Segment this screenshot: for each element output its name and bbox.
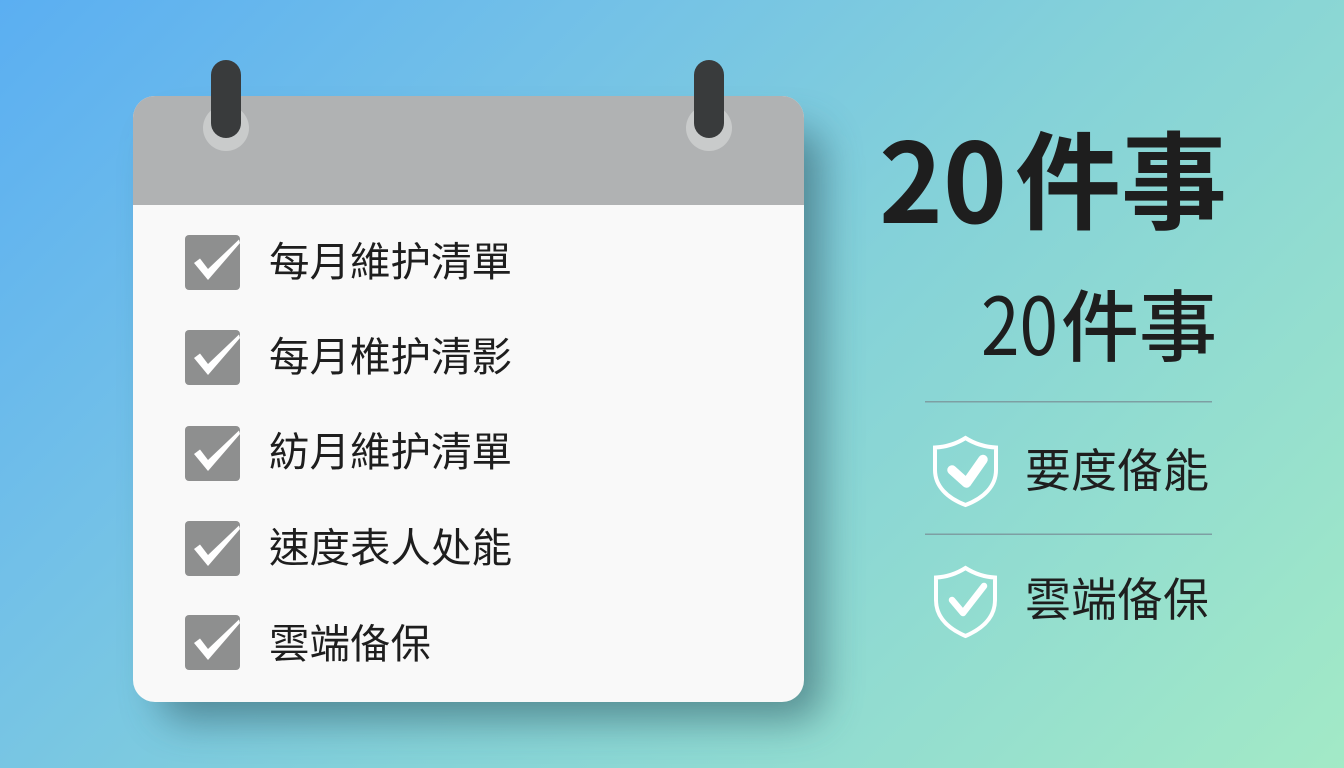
feature: 要度俻能 [935, 438, 1209, 505]
checklist item 3: 紡月維护清單 [269, 429, 512, 475]
feature: 雲端俻保: 雲端俻保 [1025, 574, 1209, 626]
subtitle [981, 263, 1217, 379]
checklist item 2 [185, 330, 512, 385]
checklist item 5: 雲端俻保 [269, 621, 431, 667]
title: 20 [879, 95, 1007, 255]
icon: shield check outline [936, 568, 995, 636]
checklist item 4 [185, 521, 512, 576]
panel: calendar card [133, 60, 822, 720]
subtitle: 20 [981, 263, 1058, 379]
checklist item 1: 每月維护清單 [269, 239, 512, 285]
binding ring left [203, 60, 249, 151]
card body [133, 96, 804, 702]
feature: 雲端俻保 [936, 568, 1209, 636]
feature: 要度俻能: 要度俻能 [1025, 445, 1209, 497]
title: 件事 [1015, 98, 1227, 252]
checklist item 4: 速度表人处能 [269, 525, 512, 571]
checklist item 1 [185, 235, 512, 290]
checklist item 2: 每月椎护清影 [269, 334, 512, 380]
checklist item 5 [185, 615, 431, 670]
checklist item 3 [185, 426, 512, 481]
title [879, 95, 1227, 255]
card shadow [160, 130, 822, 720]
binding ring right [686, 60, 732, 151]
icon: shield check [935, 438, 996, 505]
calendar header band [133, 96, 804, 205]
subtitle: 件事 [1061, 266, 1217, 378]
